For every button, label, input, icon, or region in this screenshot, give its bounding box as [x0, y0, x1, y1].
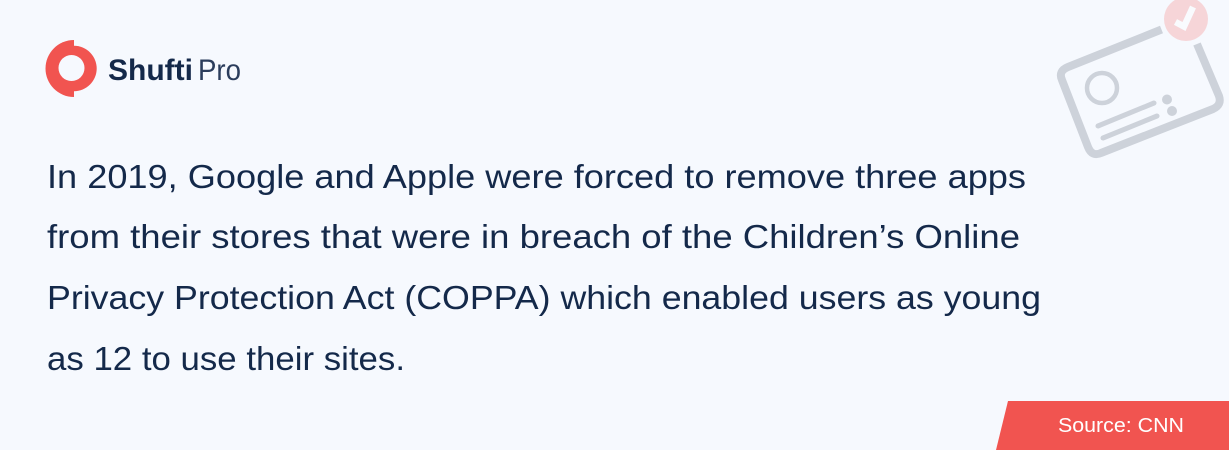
logo: Shufti Pro: [46, 40, 241, 97]
body text: Privacy Protection Act (COPPA) which enabled users as young: [47, 279, 1041, 316]
source tag: [996, 401, 1229, 450]
card photo circle: [1087, 73, 1117, 103]
logo wordmark: Shufti: Shufti: [108, 54, 193, 87]
logo wordmark: Pro: Pro: [198, 54, 241, 87]
card text lines: [1098, 103, 1157, 138]
card dots: [1162, 94, 1177, 116]
body text: [47, 158, 1041, 377]
body text: as 12 to use their sites.: [47, 340, 405, 377]
card outline: [1061, 30, 1220, 154]
icon: ID card with check badge: [1061, 0, 1220, 154]
body text: In 2019, Google and Apple were forced to remove three apps: [47, 158, 1026, 195]
icon: logo ring: [46, 40, 97, 97]
check badge: [1164, 0, 1208, 41]
body text: from their stores that were in breach of the Children’s Online: [47, 218, 1020, 255]
source tag: Source: CNN: [1058, 415, 1184, 437]
